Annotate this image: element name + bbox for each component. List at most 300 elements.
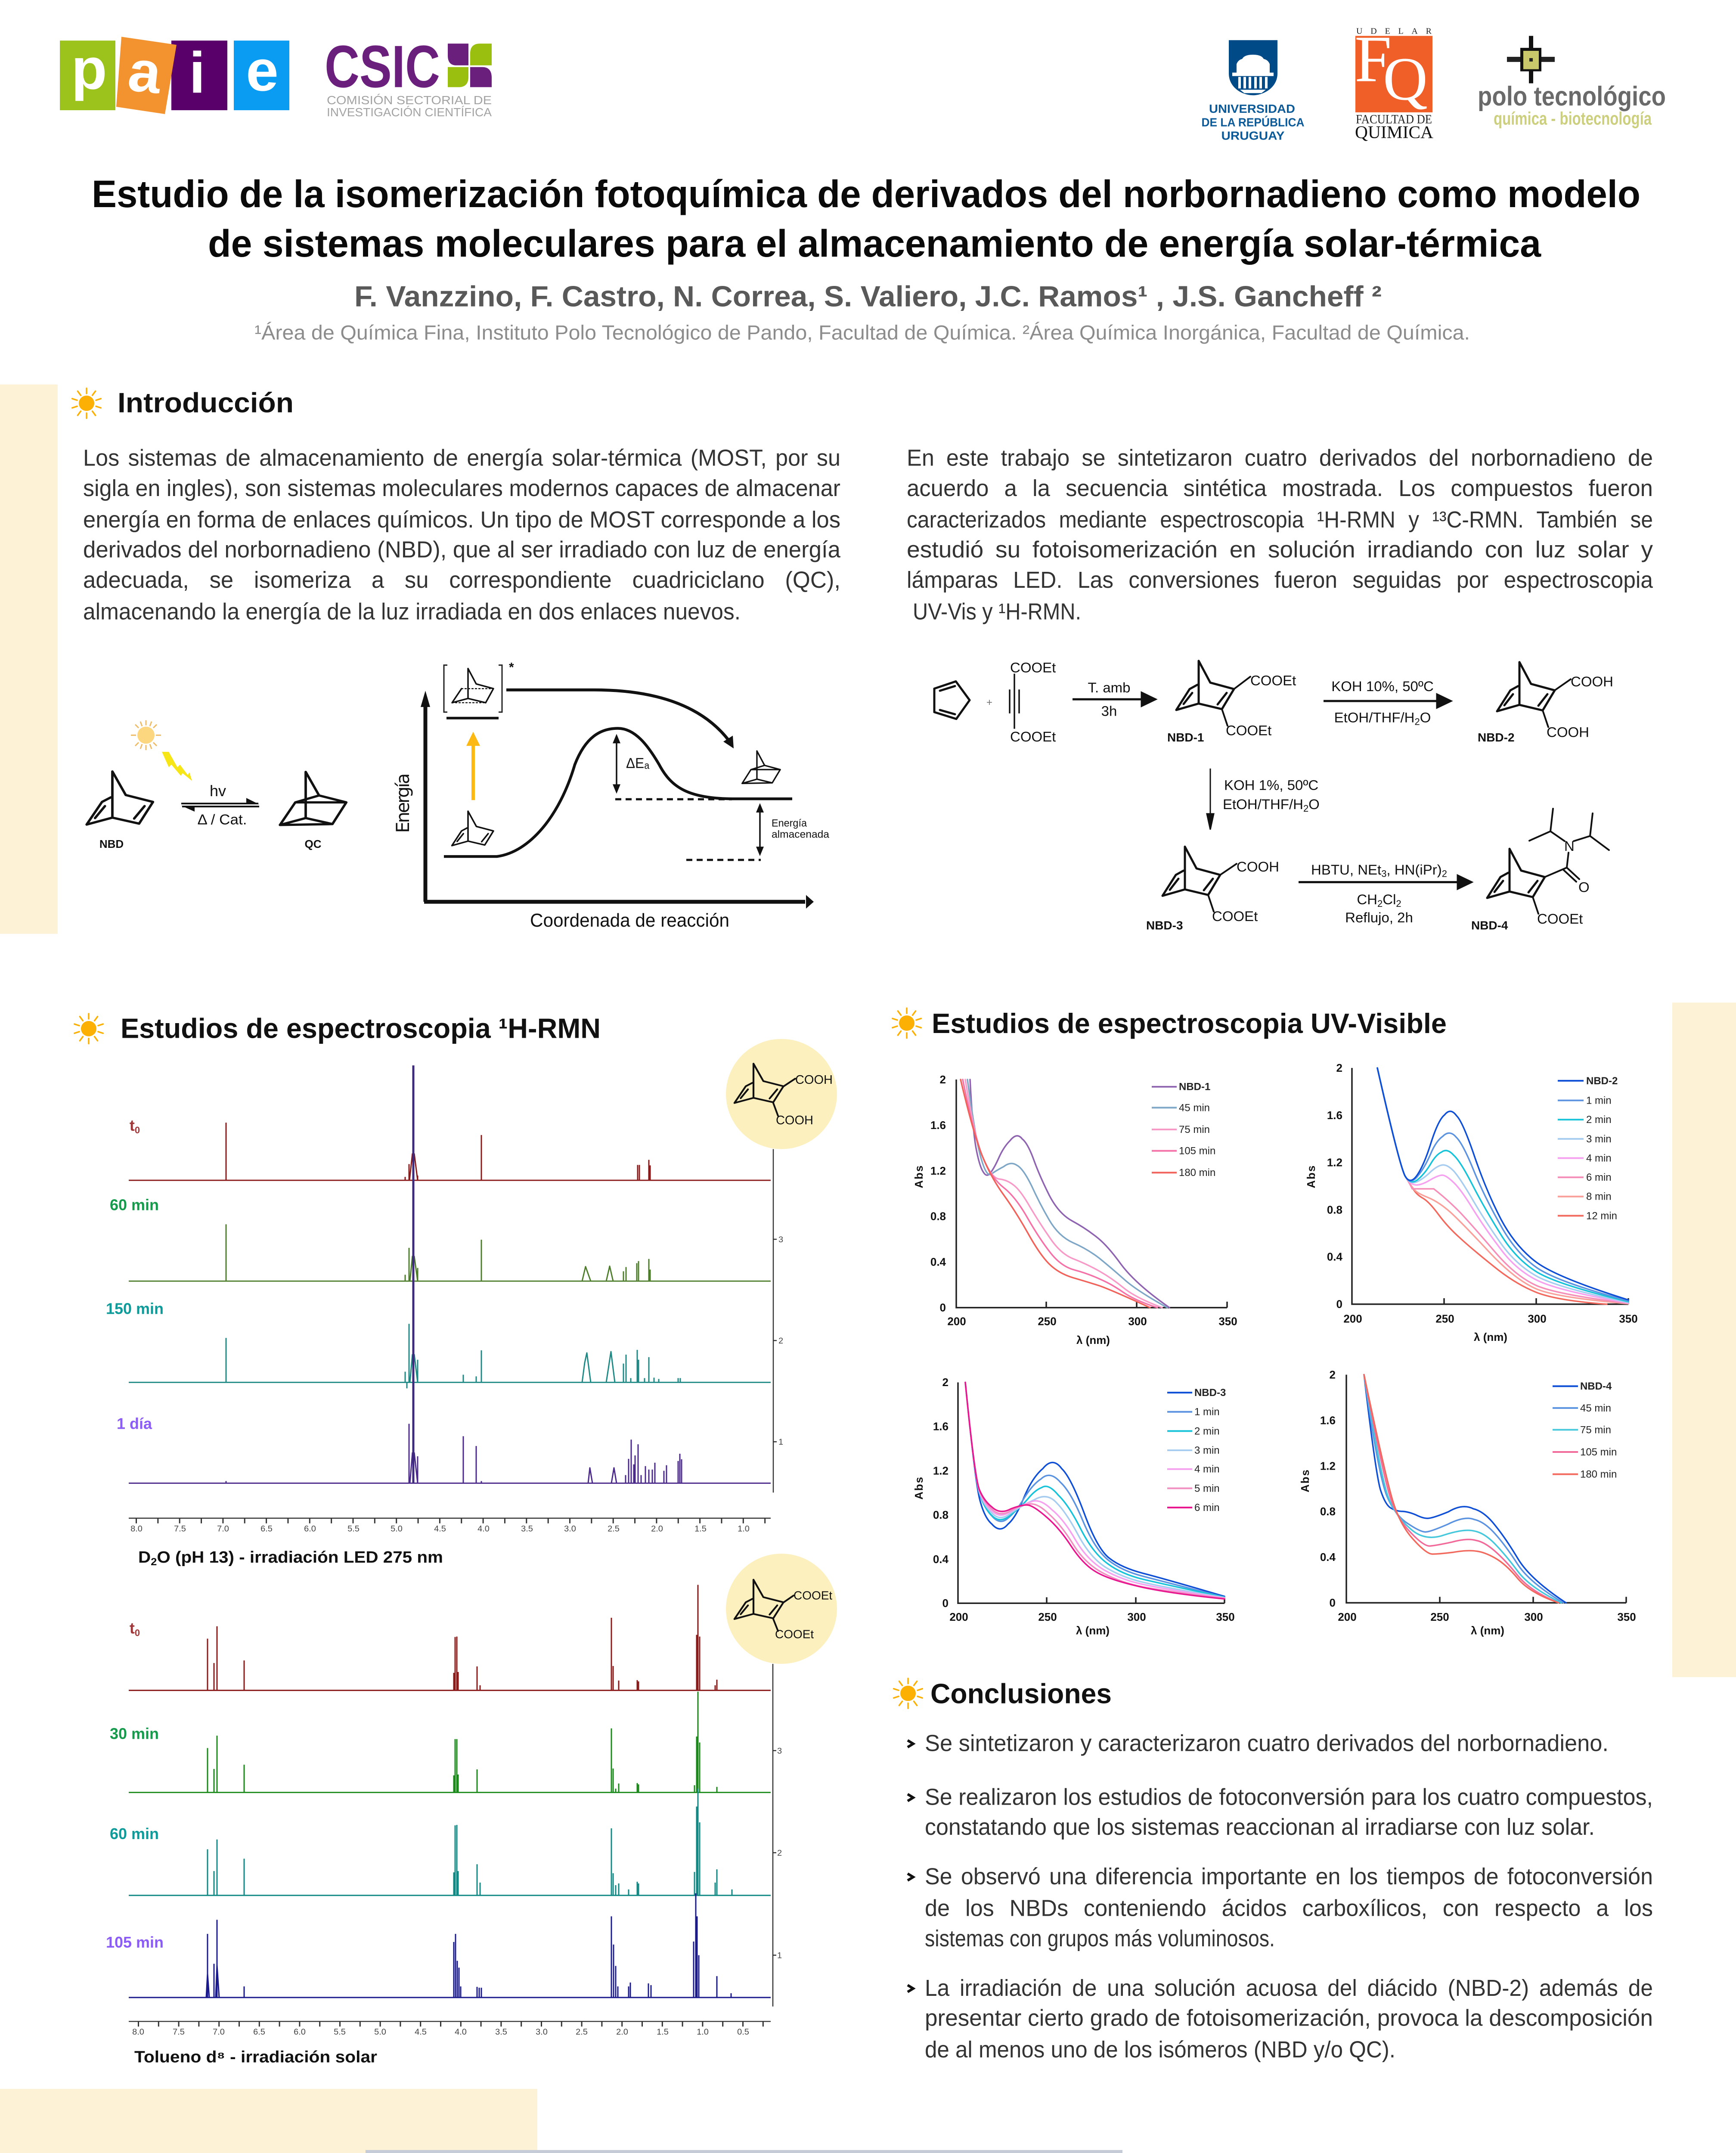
y labels	[1327, 1062, 1343, 1311]
stored energy arrowheads	[756, 803, 764, 856]
dashed levels	[615, 799, 761, 860]
right intensity axis: 3	[778, 1235, 783, 1244]
text block: intro left: derivados del norbornadieno (NBD), que al ser irradiado con luz de energía	[83, 537, 840, 563]
caption: O (pH 13) - irradiación LED 275 nm	[157, 1548, 443, 1567]
x axis: 1.5	[657, 2027, 669, 2037]
logo: PAIE: i	[189, 40, 205, 105]
caption: Tolueno d⁸ - irradiación solar	[134, 2048, 377, 2066]
logo: CSIC: COMISIÓN SECTORIAL DE	[327, 93, 492, 107]
legend: 6 min	[1586, 1172, 1612, 1183]
reagents: step 4	[1311, 862, 1447, 925]
text block: intro right: acuerdo a la secuencia sintética mostrada. Los compuestos fueron	[907, 475, 1653, 501]
x labels: 350	[1617, 1611, 1636, 1623]
conclusion 2: constatando que los sistemas reaccionan al irradiarse con luz solar.	[925, 1814, 1595, 1840]
x labels: 200	[1343, 1313, 1362, 1325]
text block: intro left: almacenando la energía de la luz irradiada en dos enlaces nuevos.	[83, 599, 741, 624]
curves	[1377, 1068, 1628, 1304]
x labels: 200	[947, 1315, 966, 1328]
y labels: 1.2	[933, 1465, 949, 1477]
axes	[1346, 1374, 1626, 1603]
excitation arrow	[466, 732, 480, 800]
labels: time points: 60 min	[110, 1197, 159, 1213]
legend: 1 min	[1194, 1406, 1220, 1418]
reagents: step 3: O	[1308, 796, 1320, 812]
legend: 105 min	[1179, 1145, 1215, 1157]
activation energy arrow	[616, 741, 617, 787]
x labels: 350	[1619, 1313, 1638, 1325]
x labels: λ (nm)	[1076, 1625, 1110, 1637]
solvent peak	[412, 1065, 414, 1483]
right intensity axis: 1	[778, 1437, 783, 1447]
x axis: 6.0	[304, 1524, 316, 1534]
caption: D	[138, 1548, 150, 1567]
x axis: 2.5	[576, 2027, 588, 2037]
axes	[1352, 1068, 1628, 1304]
logo: Facultad de Química	[1355, 22, 1433, 142]
text block: intro right: En este trabajo se sintetizaron cuatro derivados del norbornadieno de	[907, 445, 1653, 471]
molecule: NBD-4: NBD-4	[1471, 919, 1508, 932]
x axis: 1.0	[697, 2027, 709, 2037]
logo: Universidad de la República: UNIVERSIDAD	[1209, 102, 1295, 115]
caption: 2	[151, 1556, 157, 1568]
logo: PAIE: p	[71, 36, 107, 101]
molecule: NBD-3	[1146, 847, 1279, 932]
label: stored energy	[772, 818, 830, 840]
molecule: NBD-3: COOH	[1237, 859, 1279, 875]
legend: 180 min	[1580, 1469, 1617, 1480]
legend: 1 min	[1586, 1095, 1612, 1106]
reagents: step 1	[1088, 679, 1131, 719]
x axis: 7.5	[174, 1524, 186, 1534]
curves	[1364, 1374, 1566, 1603]
text block: intro left: Los sistemas de almacenamiento de energía solar-térmica (MOST, por su	[83, 445, 840, 471]
text block: intro right	[907, 445, 1653, 624]
right intensity axis: 3	[777, 1746, 782, 1756]
axis label: Energía: Energía	[392, 773, 413, 833]
conclusion 4: de al menos uno de los isómeros (NBD y/o QC).	[925, 2037, 1395, 2063]
x axis: 1.0	[738, 1524, 750, 1534]
y labels: 0.4	[930, 1256, 946, 1268]
arrow: step 2	[1324, 695, 1451, 707]
molecule: NBD-1: NBD-1	[1167, 731, 1204, 744]
bullet markers	[908, 1740, 913, 1992]
x axis: 5.5	[334, 2027, 346, 2037]
x axis: 0.5	[737, 2027, 749, 2037]
relaxation arrowhead	[723, 735, 734, 748]
reagents: step 2: KOH 10%, 50ºC	[1331, 678, 1434, 694]
icon: sun	[131, 720, 161, 750]
reagents: step 3: 2	[1303, 803, 1308, 814]
axis label: Coordenada de reacción: Coordenada de reacción	[530, 910, 729, 931]
background panel: bottom left band	[0, 2089, 537, 2153]
label: stored energy: almacenada	[772, 829, 830, 840]
compound badge: diester: COOEt	[775, 1628, 814, 1641]
label: hv: hv	[210, 782, 226, 800]
right intensity axis	[773, 1149, 783, 1492]
chart: UV NBD-4	[1299, 1369, 1636, 1637]
reagents: step 4: 3	[1381, 869, 1386, 879]
y labels: 1.6	[1327, 1110, 1342, 1122]
excited state in brackets: *	[509, 661, 514, 674]
compound badge: diacid	[726, 1039, 837, 1149]
legend: NBD-3	[1194, 1387, 1226, 1399]
reagents: step 4: 2	[1396, 898, 1401, 909]
logo: Universidad de la República: URUGUAY	[1221, 129, 1285, 142]
labels: time points: 105 min	[106, 1934, 164, 1951]
x axis: 8.0	[130, 1524, 143, 1534]
x labels	[1338, 1611, 1636, 1637]
spectrum: 1 día	[129, 1424, 771, 1483]
labels: time points: 30 min	[110, 1725, 159, 1743]
x axis: 5.5	[347, 1524, 360, 1534]
x axis: 7.5	[173, 2027, 185, 2037]
labels: time points: 150 min	[106, 1300, 164, 1318]
plus: +	[986, 697, 992, 708]
logo: PAIE: e	[246, 38, 279, 103]
labels: time points: 60 min	[110, 1825, 159, 1843]
spectrum: 150 min	[129, 1324, 771, 1388]
y labels	[933, 1377, 949, 1610]
energy curve	[444, 728, 792, 856]
legend: 105 min	[1580, 1446, 1617, 1458]
right intensity axis: 2	[777, 1849, 782, 1858]
logo: CSIC: INVESTIGACIÓN CIENTÍFICA	[327, 105, 492, 119]
molecule: NBD-1: COOEt	[1226, 722, 1271, 738]
reagents: step 4: HBTU, NEt	[1311, 862, 1381, 878]
cyclopentadiene	[934, 681, 970, 719]
legend: 2 min	[1586, 1114, 1612, 1126]
conclusion 3: Se observó una diferencia importante en los tiempos de fotoconversión	[925, 1864, 1653, 1889]
labels: time points: 1 día	[117, 1415, 152, 1432]
background panel: left intro band	[0, 385, 58, 934]
y labels: 0	[940, 1302, 946, 1314]
right intensity axis	[773, 1664, 782, 2007]
conclusion 2	[925, 1784, 1653, 1840]
x axis: 6.5	[260, 1524, 273, 1534]
x labels: 350	[1218, 1315, 1237, 1328]
y labels: 2	[1336, 1062, 1342, 1074]
reagents: step 4: Reflujo, 2h	[1345, 909, 1413, 925]
affiliations: ¹Área de Química Fina, Instituto Polo Tecnológico de Pando, Facultad de Química. ²Área Química Inorgánica, Facultad de Química.	[254, 322, 1470, 344]
reagents: step 3	[1223, 777, 1320, 814]
legend: NBD-4	[1580, 1381, 1612, 1392]
right intensity axis: 2	[778, 1336, 783, 1346]
molecule: NBD-4: N	[1564, 838, 1575, 854]
excited level	[446, 717, 499, 720]
synthesis scheme	[934, 660, 1613, 932]
conclusion 4	[925, 1975, 1653, 2063]
y title: Abs	[1305, 1165, 1318, 1188]
diethyl acetylenedicarboxylate: COOEt	[1010, 729, 1056, 745]
logo: Polo Tecnológico: química - biotecnología	[1494, 109, 1652, 129]
legend: 4 min	[1586, 1153, 1612, 1164]
legend: 2 min	[1194, 1425, 1220, 1437]
legend: 5 min	[1194, 1483, 1220, 1494]
y labels: 1.6	[1320, 1415, 1336, 1427]
reagents: step 3: EtOH/THF/H	[1223, 796, 1303, 812]
conclusion 1: Se sintetizaron y caracterizaron cuatro derivados del norbornadieno.	[925, 1731, 1609, 1756]
y labels	[1320, 1369, 1336, 1609]
compound badge: diacid: COOH	[776, 1114, 813, 1127]
x labels	[1343, 1313, 1638, 1343]
x axis: 5.0	[374, 2027, 386, 2037]
molecule: NBD-4	[1471, 809, 1609, 932]
stored energy arrow	[759, 810, 761, 850]
text block: intro left: energía en forma de enlaces químicos. Un tipo de MOST corresponde a los	[83, 507, 840, 533]
x labels: 200	[1338, 1611, 1357, 1623]
chart: NMR spectra in D2O	[106, 1039, 837, 1568]
y labels: 0.8	[933, 1509, 949, 1521]
equilibrium arrows	[181, 798, 259, 812]
logo: CSIC	[325, 33, 492, 119]
legend	[1553, 1381, 1617, 1480]
x axis: 4.5	[434, 1524, 446, 1534]
logo: PAIE: a	[125, 37, 165, 106]
conclusion 3	[925, 1864, 1653, 1951]
axes	[424, 701, 805, 902]
y labels	[930, 1074, 946, 1314]
legend: 75 min	[1580, 1424, 1611, 1436]
conclusion 2: Se realizaron los estudios de fotoconversión para los cuatro compuestos,	[925, 1784, 1653, 1810]
reagents: step 1: 3h	[1101, 703, 1117, 719]
y title: Abs	[1299, 1469, 1311, 1492]
text block: intro right: caracterizados mediante espectroscopia ¹H-RMN y ¹³C-RMN. También se	[907, 507, 1653, 533]
x labels: λ (nm)	[1474, 1331, 1507, 1343]
axis arrowheads	[421, 691, 814, 909]
labels: time points: t	[130, 1620, 135, 1637]
y labels: 1.6	[930, 1120, 946, 1132]
arrow: step 4	[1299, 876, 1471, 888]
text block: intro left: adecuada, se isomeriza a su correspondiente cuadriciclano (QC),	[83, 567, 840, 593]
spectrum: 60 min	[129, 1789, 771, 1896]
logo: Polo Tecnológico	[1478, 36, 1666, 129]
legend	[1558, 1075, 1618, 1222]
y labels: 2	[940, 1074, 946, 1086]
y labels: 0.8	[930, 1210, 946, 1222]
reagents: step 4: , HN(iPr)	[1386, 862, 1442, 878]
text block: intro right: UV-Vis y ¹H-RMN.	[913, 599, 1081, 624]
molecule: QC product	[742, 751, 780, 783]
legend: 4 min	[1194, 1464, 1220, 1475]
diagram: energy profile	[392, 661, 830, 931]
logo: Facultad de Química: FACULTAD DE	[1356, 112, 1432, 127]
x labels	[947, 1315, 1237, 1346]
logo: PAIE	[60, 36, 289, 114]
legend: 6 min	[1194, 1502, 1220, 1514]
molecule: NBD-3: NBD-3	[1146, 919, 1183, 932]
molecule: NBD-2: COOH	[1547, 724, 1589, 740]
heading: Introducción: Introducción	[118, 387, 294, 418]
diagram: NBD to QC photoisomerization	[87, 720, 346, 850]
x labels: 300	[1128, 1315, 1147, 1328]
diethyl acetylenedicarboxylate	[1010, 660, 1056, 745]
x labels: λ (nm)	[1471, 1625, 1504, 1637]
logo: Facultad de Química: F	[1355, 22, 1392, 96]
activation arrowheads	[613, 734, 620, 794]
reagents: step 4: 2	[1377, 898, 1383, 909]
y labels: 0.4	[933, 1554, 949, 1566]
y labels: 0	[942, 1598, 949, 1610]
x labels: 250	[1038, 1315, 1057, 1328]
x axis: 7.0	[213, 2027, 225, 2037]
reagents: step 2	[1331, 678, 1434, 727]
x axis: 6.0	[294, 2027, 306, 2037]
y labels: 2	[1330, 1369, 1336, 1381]
background panel: right band	[1672, 1002, 1736, 1677]
x axis: 2.0	[651, 1524, 663, 1534]
text block: intro left: sigla en ingles), son sistemas moleculares modernos capaces de almacenar	[83, 475, 840, 501]
x labels: λ (nm)	[1076, 1334, 1110, 1346]
x axis: 1.5	[694, 1524, 707, 1534]
labels: time points: 0	[135, 1125, 140, 1135]
x labels	[949, 1611, 1235, 1637]
reagents: step 1: T. amb	[1088, 679, 1131, 695]
legend: NBD-2	[1586, 1075, 1618, 1087]
x axis: 3.5	[521, 1524, 533, 1534]
logo: Universidad de la República	[1201, 40, 1305, 142]
y labels: 1.2	[1327, 1157, 1342, 1169]
spectrum: 30 min	[129, 1692, 771, 1793]
heading: UV-Visible: Estudios de espectroscopia UV-Visible	[932, 1008, 1447, 1039]
molecule: QC	[280, 772, 346, 825]
compound badge: diacid: COOH	[795, 1073, 833, 1087]
x labels: 300	[1127, 1611, 1146, 1623]
y labels: 0	[1330, 1597, 1336, 1609]
chart: UV NBD-3	[913, 1377, 1235, 1637]
legend: 75 min	[1179, 1124, 1210, 1135]
labels: time points: 0	[135, 1628, 140, 1638]
title	[92, 172, 1640, 265]
x axis: 2.0	[616, 2027, 628, 2037]
bottom grey bar	[366, 2150, 1122, 2153]
spectrum: t0	[129, 1585, 771, 1691]
label: stored energy: Energía	[772, 818, 807, 829]
y labels: 1.2	[1320, 1461, 1336, 1473]
compound badge: diester: COOEt	[794, 1588, 832, 1602]
logo: Polo Tecnológico: polo tecnológico	[1478, 81, 1666, 112]
title: Estudio de la isomerización fotoquímica de derivados del norbornadieno como modelo	[92, 172, 1640, 215]
x labels: 250	[1435, 1313, 1454, 1325]
x axis: 7.0	[217, 1524, 229, 1534]
y labels: 0.8	[1327, 1204, 1342, 1216]
y title: Abs	[913, 1165, 925, 1188]
logo: Facultad de Química: QUIMICA	[1355, 123, 1433, 142]
spectrum: t0	[129, 1123, 771, 1180]
text block: intro left	[83, 445, 840, 624]
reagents: step 3: KOH 1%, 50ºC	[1224, 777, 1318, 793]
label: catalyst: Δ / Cat.	[197, 812, 247, 828]
legend: 180 min	[1179, 1167, 1215, 1179]
logo: Facultad de Química: Q	[1383, 45, 1428, 113]
logo: Universidad de la República: DE LA REPÚBLICA	[1201, 116, 1305, 129]
label: QC: QC	[305, 838, 321, 850]
x axis: 4.0	[455, 2027, 467, 2037]
reagents: step 4: Cl	[1383, 891, 1396, 907]
conclusion 3: de los NBDs conteniendo ácidos carboxílicos, con respecto a los	[925, 1896, 1653, 1921]
y labels: 0	[1336, 1299, 1342, 1311]
title: de sistemas moleculares para el almacenamiento de energía solar-térmica	[208, 222, 1541, 265]
excited state in brackets	[444, 661, 514, 712]
x labels: 250	[1038, 1611, 1057, 1623]
x labels: 300	[1524, 1611, 1543, 1623]
x labels: 300	[1528, 1313, 1547, 1325]
heading: Conclusiones: Conclusiones	[930, 1678, 1112, 1709]
compound badge: diester	[726, 1554, 837, 1664]
relaxation arrow	[506, 690, 729, 741]
legend: 45 min	[1580, 1402, 1611, 1414]
logo: CSIC: CSIC	[325, 33, 440, 100]
legend: 3 min	[1586, 1133, 1612, 1145]
curves	[961, 1080, 1169, 1308]
reagents: step 4: 2	[1442, 869, 1447, 879]
y labels: 1.2	[930, 1165, 946, 1177]
molecule: NBD-4: O	[1578, 879, 1590, 895]
x labels: 250	[1430, 1611, 1449, 1623]
chart: UV NBD-2	[1305, 1062, 1638, 1343]
conclusion 3: sistemas con grupos más voluminosos.	[925, 1926, 1275, 1951]
curves	[965, 1382, 1224, 1599]
x axis: 8.0	[132, 2027, 144, 2037]
x axis: 6.5	[253, 2027, 265, 2037]
x labels: 200	[949, 1611, 968, 1623]
conclusion 4: La irradiación de una solución acuosa del diácido (NBD-2) además de	[925, 1975, 1653, 2001]
label: NBD: NBD	[99, 838, 124, 850]
conclusion 4: presentar cierto grado de fotoisomerización, provoca la descomposición	[925, 2005, 1653, 2031]
y labels: 0.4	[1320, 1551, 1336, 1564]
y labels: 0.4	[1327, 1251, 1343, 1263]
chart: NMR spectra in toluene	[106, 1554, 837, 2066]
icon: lightning bolt	[162, 752, 192, 781]
molecule: NBD ground state	[452, 811, 493, 846]
legend	[1152, 1081, 1215, 1179]
reagents: step 4: CH	[1357, 891, 1377, 907]
labels: time points	[106, 1620, 164, 1951]
label: activation energy: ΔEₐ	[626, 755, 649, 772]
spectrum: 105 min	[129, 1893, 771, 1998]
x axis: 3.0	[564, 1524, 576, 1534]
right intensity axis: 1	[777, 1951, 782, 1961]
x axis: 4.0	[477, 1524, 490, 1534]
x labels: 350	[1216, 1611, 1235, 1623]
diethyl acetylenedicarboxylate: COOEt	[1010, 660, 1056, 675]
arrow: step 1	[1073, 693, 1155, 706]
heading: RMN: Estudios de espectroscopia ¹H-RMN	[121, 1013, 601, 1044]
text block: intro right: lámparas LED. Las conversiones fueron seguidas por espectroscopia	[907, 567, 1653, 593]
reagents: step 2: O	[1420, 710, 1431, 726]
reagents: step 2: 2	[1415, 717, 1420, 727]
x axis: 3.5	[495, 2027, 507, 2037]
x axis: 5.0	[391, 1524, 403, 1534]
legend: 12 min	[1586, 1210, 1617, 1222]
authors: F. Vanzzino, F. Castro, N. Correa, S. Valiero, J.C. Ramos¹ , J.S. Gancheff ²	[354, 281, 1382, 313]
x axis	[129, 1518, 771, 1534]
legend	[1167, 1387, 1226, 1514]
molecule: NBD-2: NBD-2	[1478, 731, 1515, 744]
y title: Abs	[913, 1476, 925, 1500]
legend: 8 min	[1586, 1191, 1612, 1203]
logo: Facultad de Química: UDELAR	[1356, 26, 1432, 36]
arrow: step 3	[1207, 769, 1214, 830]
x axis	[129, 2021, 771, 2037]
molecule: NBD-4: COOEt	[1537, 911, 1583, 927]
molecule: NBD-3: COOEt	[1212, 908, 1258, 924]
text block: intro right: estudió su fotoisomerización en solución irradiando con luz solar y	[907, 537, 1653, 563]
molecule: NBD-2: COOH	[1571, 673, 1613, 689]
y labels: 0.8	[1320, 1506, 1336, 1518]
y labels: 1.6	[933, 1421, 949, 1433]
reagents: step 2: EtOH/THF/H	[1334, 710, 1415, 726]
molecule: NBD-1	[1167, 661, 1296, 744]
